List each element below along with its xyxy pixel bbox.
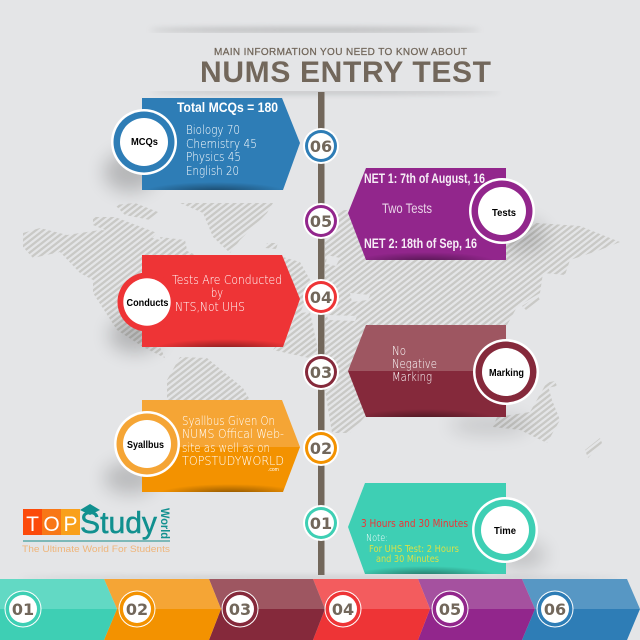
logo: Top Study World: O (43, 513, 60, 536)
panel: MCQs: English 20 (186, 163, 239, 178)
logo: Top Study World: World (158, 508, 172, 539)
panel: Syllabus: .com (268, 467, 279, 473)
panel: Tests: NET 2: 18th of Sep, 16 (364, 235, 477, 251)
panel: Syllabus: NUMS Offical Web- (182, 426, 284, 441)
panel: Marking: Negative (392, 356, 437, 371)
panel: Time: Note: (366, 533, 388, 544)
bottom band chevron 02 (104, 579, 221, 640)
bottom band chevron 03 (209, 579, 325, 640)
bottom badge 05: 05 (439, 600, 461, 619)
bottom badge 04: 04 (332, 600, 354, 619)
panel: MCQs: Physics 45 (186, 149, 241, 164)
timeline marker 05: 05 (310, 212, 332, 231)
central timeline pole (318, 92, 324, 575)
panel: Syllabus (104, 400, 302, 504)
logo: Top Study World: P (63, 513, 78, 536)
bottom band shadow (20, 576, 620, 580)
timeline marker 03 (303, 354, 339, 390)
timeline marker 02: 02 (310, 439, 332, 458)
timeline marker 01: 01 (310, 514, 332, 533)
panel: Syllabus: Syallbus Given On (182, 413, 275, 428)
panel: Time: 3 Hours and 30 Minutes (361, 518, 468, 530)
logo: Top Study World: The Ultimate World For Students (22, 544, 170, 555)
timeline marker 04 (303, 279, 339, 315)
panel: Tests (348, 168, 546, 272)
heading: MAIN INFORMATION YOU NEED TO KNOW ABOUT (214, 47, 467, 58)
panel: MCQs: Total MCQs = 180 (177, 99, 278, 115)
bottom badge 01 (4, 590, 42, 628)
panel: Marking: Marking (489, 367, 524, 379)
panel: Syllabus: TOPSTUDYWORLD (182, 453, 284, 468)
timeline marker 03: 03 (310, 363, 332, 382)
bottom band chevron 04 (313, 579, 430, 640)
logo: Top Study World (22, 504, 172, 555)
bottom badge 06 (536, 590, 574, 628)
timeline marker 04: 04 (310, 288, 332, 307)
panel: MCQs: Biology 70 (186, 122, 240, 137)
heading: NUMS ENTRY TEST (200, 56, 491, 89)
panel: Marking: Marking (392, 369, 432, 384)
panel: Tests: NET 1: 7th of August, 16 (364, 170, 485, 186)
panel: Syllabus: site as well as on (182, 440, 270, 455)
panel: MCQs (104, 98, 300, 202)
bottom badge 05 (432, 590, 468, 628)
bottom badge 01: 01 (12, 600, 34, 619)
bottom band chevron 01 (0, 579, 117, 640)
panel: Time: Time (494, 525, 516, 537)
bottom badge 06: 06 (544, 600, 566, 619)
timeline marker 05 (303, 203, 339, 239)
timeline marker 06 (303, 128, 339, 164)
panel: Marking: No (392, 343, 406, 358)
bottom band chevron 06 (522, 579, 640, 640)
panel: Syllabus: Syallbus (127, 439, 164, 451)
panel: MCQs: MCQs (131, 136, 158, 148)
logo: Top Study World: T (26, 513, 39, 536)
panel: Tests: Tests (492, 207, 516, 219)
panel: Conducts: Conducts (126, 297, 169, 309)
bottom band chevron 05 (418, 579, 535, 640)
world map (23, 203, 620, 458)
panel: Marking (348, 325, 539, 435)
bottom badge 02: 02 (126, 600, 148, 619)
panel: Conducts (109, 255, 300, 359)
title block shadows (120, 28, 520, 94)
logo: Top Study World: Study (80, 505, 157, 540)
timeline marker 06: 06 (310, 137, 332, 156)
panel: Conducts: by (211, 285, 223, 300)
bottom badge 03 (222, 590, 258, 628)
panel: Conducts: Tests Are Conducted (172, 272, 282, 287)
bottom badge 02 (118, 590, 156, 628)
panel: Conducts: NTS,Not UHS (175, 299, 245, 314)
panel: Time (348, 483, 548, 574)
panel: Time: For UHS Test: 2 Hours (369, 544, 459, 555)
timeline marker 01 (303, 505, 339, 541)
panel: Tests: Two Tests (382, 200, 432, 216)
panel: Time: and 30 Minutes (376, 554, 439, 565)
panel: MCQs: Chemistry 45 (186, 136, 257, 151)
bottom badge 04 (324, 590, 362, 628)
bottom badge 03: 03 (229, 600, 251, 619)
timeline marker 02 (303, 430, 339, 466)
